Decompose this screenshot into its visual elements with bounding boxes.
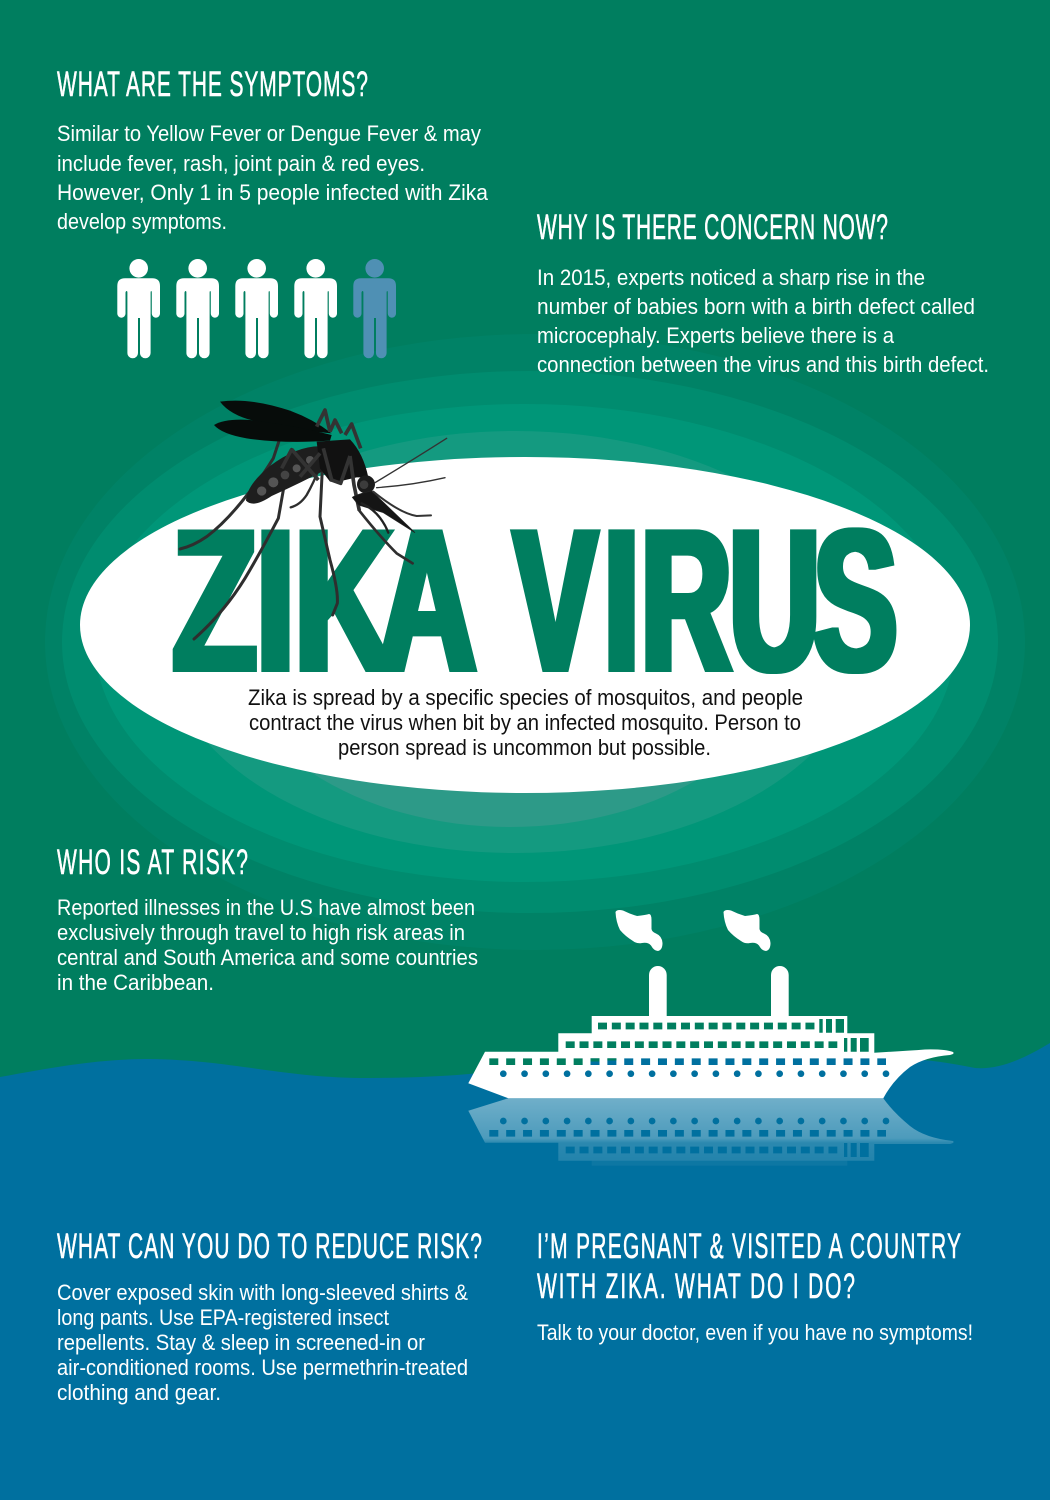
text block: who is at risk (57, 895, 478, 995)
text block: why concern: In 2015, experts noticed a sharp rise in the (537, 265, 925, 290)
text block: why concern: connection between the virus and this birth defect. (537, 352, 989, 377)
sea (0, 1043, 1050, 1500)
text block: how Zika spreads: contract the virus when bit by an infected mosquito. Person to (249, 710, 801, 735)
text block: who is at risk: Reported illnesses in the U.S have almost been (57, 895, 475, 920)
mosquito head and eye (357, 475, 375, 493)
heading: pregnant (537, 1228, 961, 1306)
text block: symptoms: However, Only 1 in 5 people infected with Zika (57, 180, 489, 205)
text block: reduce risk: air-conditioned rooms. Use permethrin-treated (57, 1355, 468, 1380)
text block: reduce risk: clothing and gear. (57, 1380, 221, 1405)
text block: how Zika spreads: Zika is spread by a specific species of mosquitos, and people (248, 685, 803, 710)
text block: symptoms (57, 121, 489, 234)
ship reflection (468, 1098, 954, 1166)
ship windows (489, 1019, 887, 1074)
heading: who is at risk: WHO IS AT RISK? (57, 844, 248, 882)
text block: how Zika spreads (248, 685, 803, 760)
text block: why concern (537, 265, 989, 377)
heading: pregnant: WITH ZIKA. WHAT DO I DO? (537, 1268, 855, 1306)
heading: why concern: WHY IS THERE CONCERN NOW? (537, 209, 888, 247)
text block: symptoms: develop symptoms. (57, 209, 227, 234)
mosquito raised knees (282, 410, 361, 511)
text block: how Zika spreads: person spread is uncommon but possible. (338, 735, 711, 760)
mosquito wings (214, 401, 332, 442)
ship smoke puffs (616, 910, 770, 951)
icon: cruise ship (468, 910, 954, 1166)
mosquito abdomen (246, 446, 332, 504)
central white oval (80, 457, 970, 793)
icon: mosquito (180, 401, 447, 639)
text block: reduce risk (57, 1280, 468, 1405)
mosquito thorax (317, 439, 368, 482)
text block: who is at risk: in the Caribbean. (57, 970, 214, 995)
text block: who is at risk: exclusively through travel to high risk areas in (57, 920, 465, 945)
title: ZIKA VIRUS: VIRUS (514, 488, 897, 713)
title: ZIKA VIRUS: ZIKA (173, 488, 477, 713)
text block: symptoms: include fever, rash, joint pain & red eyes. (57, 151, 425, 176)
heading: symptoms: WHAT ARE THE SYMPTOMS? (57, 66, 368, 104)
text block: who is at risk: central and South America and some countries (57, 945, 478, 970)
heading: reduce risk: WHAT CAN YOU DO TO REDUCE RISK? (57, 1228, 482, 1266)
mosquito proboscis and antennae (352, 438, 447, 533)
mosquito legs (180, 440, 413, 639)
text block: reduce risk: Cover exposed skin with long-sleeved shirts & (57, 1280, 468, 1305)
text block: symptoms: Similar to Yellow Fever or Dengue Fever & may (57, 121, 481, 146)
text block: reduce risk: long pants. Use EPA-registered insect (57, 1305, 389, 1330)
text block: reduce risk: repellents. Stay & sleep in screened-in or (57, 1330, 425, 1355)
text block: why concern: number of babies born with a birth defect called (537, 294, 975, 319)
text block: why concern: microcephaly. Experts believe there is a (537, 323, 895, 348)
halo rings around the central oval (45, 334, 1025, 950)
title: ZIKA VIRUS (173, 488, 897, 713)
ship hull and decks (468, 966, 954, 1098)
text block: pregnant: Talk to your doctor, even if you have no symptoms! (537, 1320, 973, 1345)
icon: five people, one in five highlighted (117, 259, 396, 358)
heading: pregnant: I’M PREGNANT & VISITED A COUNTRY (537, 1228, 961, 1266)
